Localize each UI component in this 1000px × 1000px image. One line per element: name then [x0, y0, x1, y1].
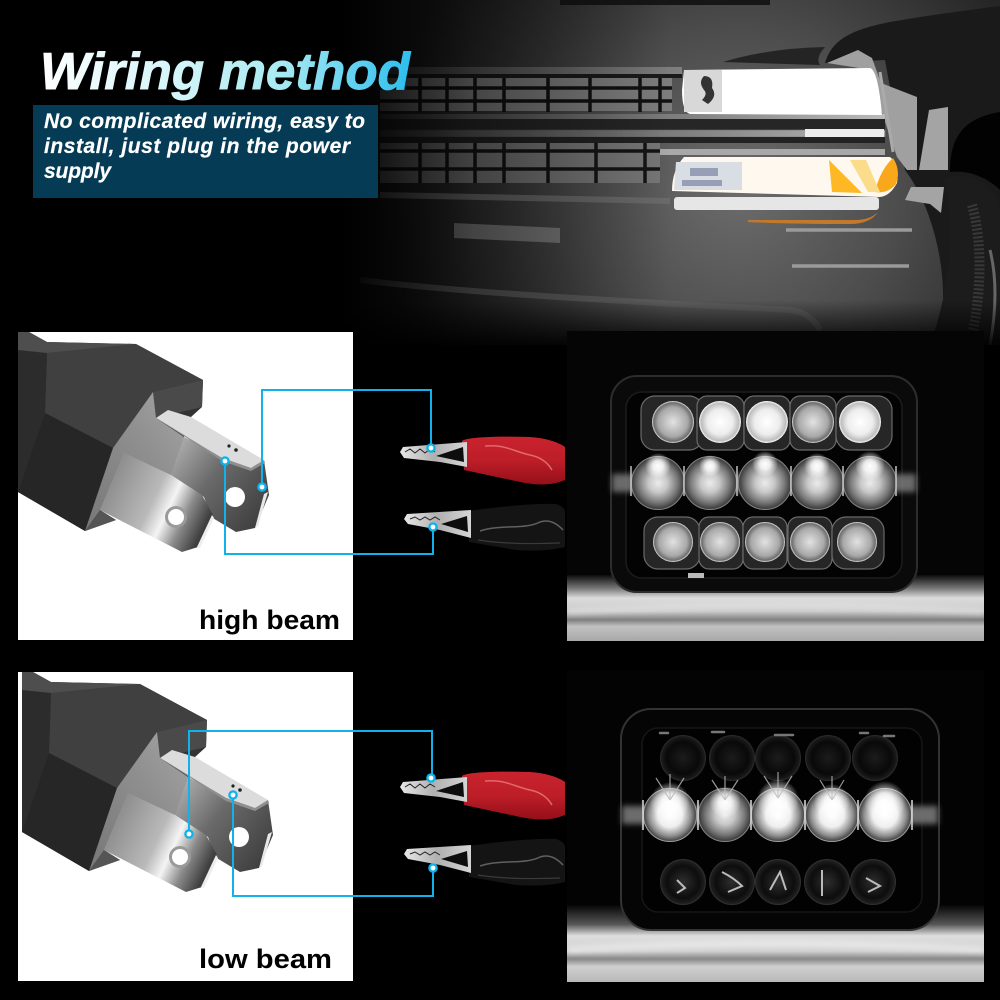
lamp housing	[611, 376, 917, 592]
upper headlight	[682, 68, 893, 152]
icon: red clip high beam	[400, 437, 565, 484]
top lens row	[641, 396, 892, 450]
label: low beam: low beam	[199, 944, 332, 974]
photo: truck front with headlights	[340, 0, 1000, 350]
bottom lens row off	[660, 859, 896, 905]
subtitle text: supply	[44, 160, 112, 183]
top lens row off	[660, 732, 898, 781]
icon: H4 plug	[18, 332, 269, 552]
fender dark body	[825, 6, 1000, 330]
tire	[930, 176, 1000, 345]
icon: H4 plug	[22, 672, 273, 892]
lower bumper	[360, 280, 820, 330]
panel: high beam lamp photo	[567, 331, 984, 641]
icon: red clip low beam	[400, 772, 565, 819]
subtitle panel	[33, 105, 378, 198]
icon: black clip low beam	[404, 839, 565, 886]
hood shadow	[723, 47, 825, 65]
chrome bars	[380, 114, 885, 119]
bumper lines	[786, 230, 912, 266]
lower headlight	[672, 157, 898, 197]
panel: high beam connector	[18, 332, 353, 640]
panel: low beam lamp photo	[567, 708, 984, 982]
label: high beam: high beam	[199, 605, 340, 635]
wiring: high beam red lead	[258, 390, 435, 491]
body reflection patches	[827, 50, 917, 170]
daytime running light bar	[612, 451, 916, 510]
amber reflection	[748, 212, 878, 224]
wheel arch	[950, 112, 1000, 190]
subtitle text: install, just plug in the power	[44, 135, 352, 158]
panel: low beam connector	[18, 672, 353, 981]
grille lower	[380, 143, 660, 183]
windshield base	[560, 0, 770, 5]
bottom lens row	[644, 517, 884, 569]
title: Wiring method	[40, 43, 411, 101]
lamp housing	[621, 709, 939, 930]
bumper light strip	[674, 197, 879, 210]
badge plate	[454, 223, 560, 243]
wiring: low beam black lead	[229, 791, 437, 896]
wiring: low beam red lead	[185, 731, 435, 838]
grille upper	[380, 67, 682, 112]
subtitle text: No complicated wiring, easy to	[44, 110, 365, 133]
low beam light bar	[622, 772, 938, 842]
icon: black clip high beam	[404, 504, 565, 551]
wiring: high beam black lead	[221, 457, 437, 554]
